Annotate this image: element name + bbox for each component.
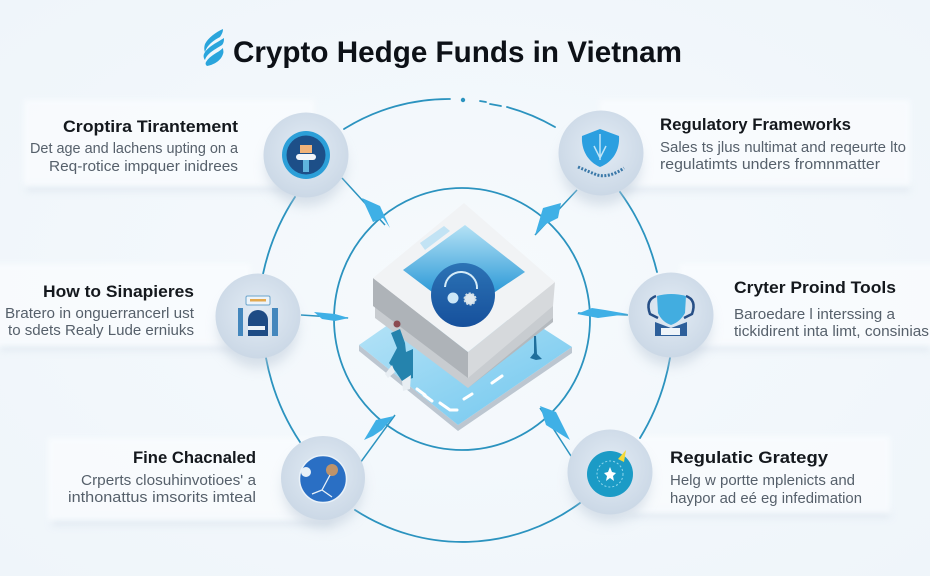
base plate bbox=[359, 320, 572, 431]
central platform illustration bbox=[359, 203, 572, 431]
arrow: bottom right bbox=[540, 406, 570, 440]
arrow: top left bbox=[362, 198, 390, 228]
body bbox=[5, 305, 195, 339]
body: haypor ad eé eg infedimation bbox=[670, 490, 862, 507]
node: top left bbox=[264, 112, 348, 206]
heading: How to Sinapieres bbox=[43, 282, 194, 301]
text: top left bbox=[30, 117, 239, 175]
node: middle left bbox=[216, 274, 300, 368]
icon: helmet badge bbox=[282, 131, 330, 179]
body: to sdets Realy Lude erniuks bbox=[8, 322, 194, 339]
panel: card middle right bbox=[680, 264, 930, 350]
body: Req-rotice impquer inidrees bbox=[49, 158, 238, 175]
arrow: top right bbox=[535, 203, 561, 235]
body: inthonattus imsorits imteal bbox=[68, 489, 256, 506]
disc bbox=[431, 263, 495, 327]
text: middle left bbox=[5, 282, 195, 339]
cube top face bbox=[373, 203, 555, 352]
body: Det age and lachens upting on a bbox=[30, 140, 239, 157]
text: bottom right bbox=[670, 448, 862, 507]
heading: Regulatic Grategy bbox=[670, 448, 829, 467]
icon: shield bbox=[578, 129, 624, 176]
arrow: bottom left bbox=[364, 416, 394, 440]
body: Baroedare l interssing a bbox=[734, 306, 896, 323]
node: bottom right bbox=[568, 430, 652, 522]
body bbox=[30, 140, 239, 175]
body bbox=[670, 472, 862, 507]
panel: card bottom right bbox=[610, 436, 890, 517]
arrow: middle left bbox=[314, 312, 349, 321]
screen bbox=[403, 225, 525, 292]
diagram: inner ring bbox=[334, 188, 590, 450]
cube sides bbox=[373, 278, 468, 378]
screen accent bbox=[420, 226, 450, 250]
disc gear bbox=[464, 294, 476, 304]
body bbox=[660, 139, 906, 173]
heading: Regulatory Frameworks bbox=[660, 115, 851, 134]
cube lower layer bbox=[373, 312, 553, 388]
icon: radar bbox=[587, 450, 633, 497]
node: middle right bbox=[628, 272, 714, 366]
text: bottom left bbox=[68, 448, 257, 506]
title text: Crypto Hedge Funds in Vietnam bbox=[233, 36, 682, 69]
heading: Fine Chacnaled bbox=[133, 448, 256, 467]
title bbox=[204, 29, 682, 69]
icon: globe network bbox=[300, 456, 346, 502]
heading: Cryter Proind Tools bbox=[734, 278, 896, 297]
text: top right bbox=[660, 115, 906, 173]
disc dot bbox=[448, 292, 458, 304]
disc arc bbox=[445, 272, 477, 289]
panel: card bottom left bbox=[48, 438, 332, 525]
body: Crperts closuhinvotioes' a bbox=[81, 472, 257, 489]
body: Helg w portte mplenicts and bbox=[670, 472, 855, 489]
body: Sales ts jlus nultimat and reqeurte lto bbox=[660, 139, 906, 156]
body: regulatimts unders fromnmatter bbox=[660, 156, 880, 173]
arrow: middle right bbox=[577, 308, 628, 318]
heading: Croptira Tirantement bbox=[63, 117, 238, 136]
icon: logo flame bbox=[204, 29, 224, 66]
body bbox=[734, 306, 929, 340]
icon: gateway bbox=[238, 296, 278, 336]
panel: card top left bbox=[24, 100, 316, 191]
body: Bratero in onguerrancerl ust bbox=[5, 305, 195, 322]
body: tickidirent inta limt, consinias bbox=[734, 323, 929, 340]
bollard bbox=[530, 336, 542, 360]
node: bottom left bbox=[281, 436, 365, 528]
diagram: outer ring bbox=[263, 98, 670, 542]
node: top right bbox=[558, 110, 644, 205]
person bbox=[385, 320, 413, 391]
panel: card top right bbox=[600, 100, 910, 191]
icon: trophy shield bbox=[648, 294, 694, 336]
connectors bbox=[301, 178, 628, 470]
body bbox=[68, 472, 257, 506]
panel: card middle left bbox=[0, 264, 250, 350]
text: middle right bbox=[734, 278, 929, 340]
